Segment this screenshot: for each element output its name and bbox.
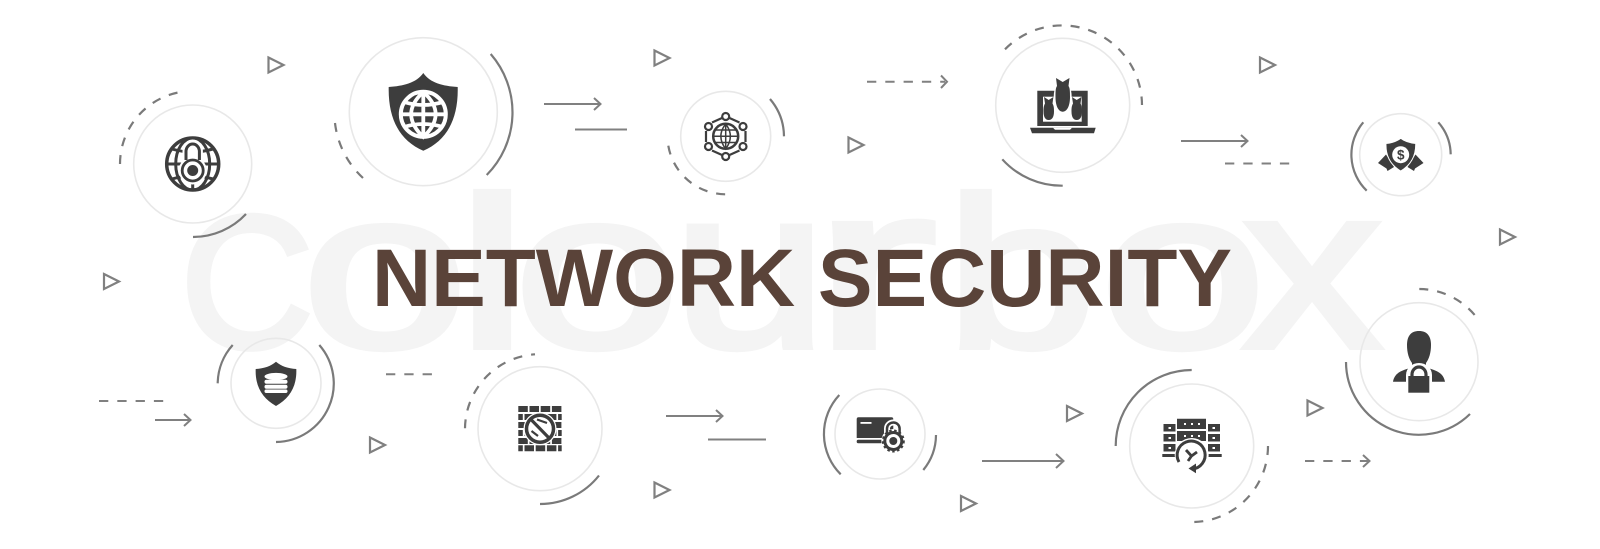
watermark: u: [672, 142, 828, 396]
watermark: o: [302, 143, 468, 395]
watermark: l: [456, 154, 528, 393]
node 5: dollar shield: [1351, 114, 1451, 196]
icon: server rack with clock: [1162, 419, 1222, 473]
icon: shield with globe: [389, 73, 458, 151]
node 7: database shield: [218, 338, 334, 442]
arrow: shield to network: [544, 98, 600, 110]
icon: laptop with bombs: [1030, 78, 1096, 133]
icon: shield with database: [256, 362, 296, 406]
watermark: r: [812, 137, 937, 397]
arrow: card to server: [982, 454, 1064, 468]
icon: credit card with lock: [857, 417, 905, 453]
title: NETWORK SECURITY: [372, 233, 1232, 324]
arrow: firewall to card: [666, 410, 722, 422]
arrows and connector lines: [99, 76, 1370, 468]
arrow: dashed to laptop: [867, 81, 945, 83]
node 4: laptop with bombs: [996, 25, 1142, 186]
arrow: laptop to dollar shield: [1181, 135, 1248, 147]
node 3: network globe: [668, 91, 784, 194]
watermark: o: [514, 143, 680, 395]
node 6: person with lock: [1346, 289, 1478, 435]
node 2: shield globe: [335, 38, 512, 186]
arrow: server to person: [1305, 460, 1368, 462]
icon: shield with dollar and arrows: $: [1397, 148, 1405, 162]
node 10: server backup: [1116, 370, 1268, 522]
icon: globe with lock: [167, 138, 219, 190]
node 1: globe lock: [120, 92, 252, 237]
watermark: b: [946, 154, 1097, 393]
watermark: o: [1100, 143, 1266, 395]
arrow: to database shield: [155, 414, 190, 426]
node 9: card lock: [824, 389, 936, 479]
watermark: x: [1243, 137, 1382, 397]
decorative triangles: [104, 50, 1515, 511]
icon: network globe: [705, 113, 746, 160]
icon: person with padlock: [1393, 331, 1445, 393]
watermark: C: [181, 177, 313, 387]
node 8: firewall: [465, 354, 602, 504]
icon: brick wall with blocked bug: [518, 409, 562, 448]
